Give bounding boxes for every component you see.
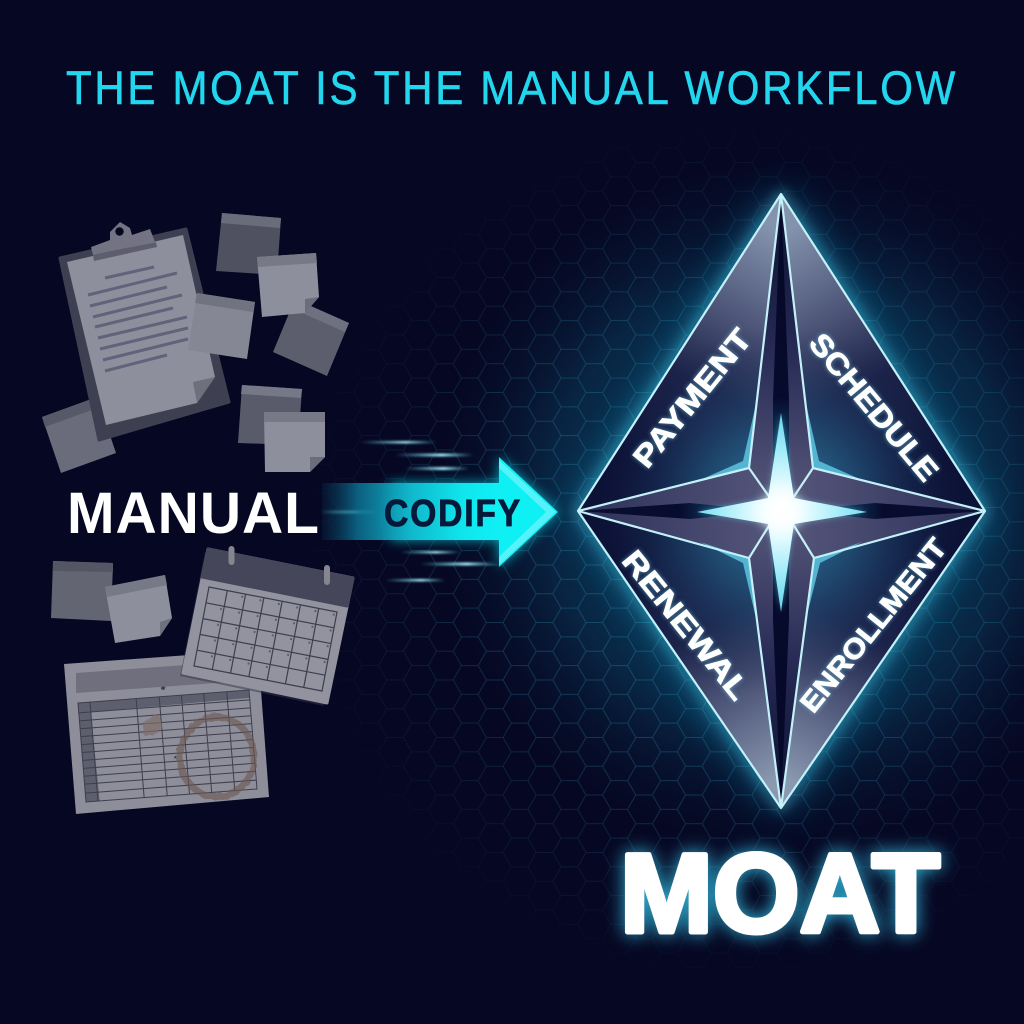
sticky note: folded	[257, 253, 319, 317]
icon: calendar	[180, 549, 353, 706]
label: schedule: SCHEDULE	[802, 327, 944, 488]
sticky note: folded	[105, 575, 172, 643]
sticky note: lower folded	[264, 412, 325, 472]
core star	[697, 413, 867, 612]
label: manual: MANUAL	[67, 481, 320, 546]
icon: clipboard	[60, 222, 229, 440]
facet labels	[615, 323, 953, 718]
spreadsheet	[64, 650, 269, 814]
speed streaks	[320, 441, 498, 582]
facet: lower right	[781, 511, 985, 808]
inner facets	[578, 194, 985, 808]
sticky note: dark top	[216, 213, 281, 275]
label: moat: MOAT	[620, 831, 940, 956]
sticky note: left	[51, 561, 113, 621]
facet: upper left	[578, 194, 781, 511]
label: renewal: RENEWAL	[615, 545, 755, 707]
diamond: moat	[578, 194, 985, 808]
label: payment: PAYMENT	[627, 323, 758, 474]
facet: upper right	[781, 194, 985, 511]
bevel highlights	[700, 395, 862, 627]
panel: manual artifacts bottom	[51, 549, 353, 814]
coffee ring stain	[139, 687, 254, 797]
arrow label: CODIFY	[384, 493, 522, 535]
arrow: codify	[320, 441, 558, 582]
facet: lower left	[578, 511, 781, 808]
sticky note: lower dark	[238, 385, 302, 445]
sticky note: centre	[188, 293, 255, 359]
panel: manual artifacts top	[42, 213, 349, 473]
background	[331, 148, 1024, 949]
label: enrollment: ENROLLMENT	[794, 532, 953, 718]
sticky note: tilted right	[273, 299, 349, 376]
sticky note: behind clipboard	[42, 397, 116, 473]
edge lines	[578, 194, 985, 808]
